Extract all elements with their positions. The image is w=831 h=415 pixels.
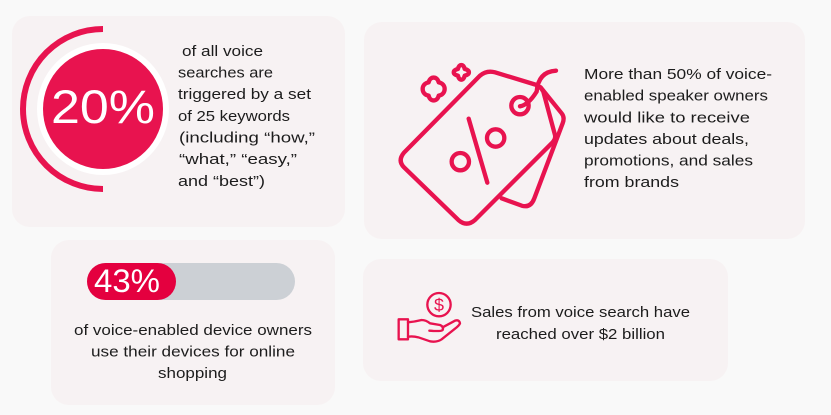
text: 20% description: triggered by a set [178, 86, 312, 103]
text: 20% description: (including “how,” [179, 130, 315, 146]
text: 20% description: “what,” “easy,” [179, 151, 297, 168]
text: deals description: enabled speaker owners [584, 88, 768, 104]
text: deals description: updates about deals, [584, 131, 749, 148]
text: 20% description: and “best”) [178, 173, 265, 190]
panel: 43% online shopping [51, 240, 335, 405]
text: shopping description [74, 322, 312, 382]
text: 20% description: of all voice [182, 43, 263, 60]
text: sales description: Sales from voice search have [471, 304, 690, 321]
icon: hand with dollar coin [399, 293, 460, 342]
panel: 20% of voice searches [12, 16, 345, 227]
progress bar: 43% [94, 263, 160, 299]
progress bar [87, 263, 295, 300]
20% badge [37, 43, 169, 175]
text: deals description: from brands [584, 174, 679, 191]
text: deals description: promotions, and sales [584, 152, 753, 170]
text: deals description: would like to receive [583, 110, 750, 126]
text: 20% description: searches are [178, 64, 273, 82]
text: 20% description: of 25 keywords [178, 108, 290, 125]
panel: voice search sales [363, 259, 728, 381]
text: deals description: More than 50% of voice- [584, 66, 772, 83]
text: deals description [583, 66, 772, 191]
20% badge: 20% [51, 80, 155, 133]
icon: price tags [401, 65, 564, 224]
text: sales description: reached over $2 billion [496, 326, 665, 343]
text: sales description [471, 304, 690, 343]
panel: deals and promotions [364, 22, 805, 239]
text: shopping description: of voice-enabled device owners [74, 322, 312, 339]
text: shopping description: use their devices for online [91, 344, 295, 360]
text: 20% description [178, 43, 315, 190]
icon: hand with dollar coin: $ [434, 295, 444, 315]
text: shopping description: shopping [158, 365, 227, 382]
progress arc [23, 29, 103, 189]
